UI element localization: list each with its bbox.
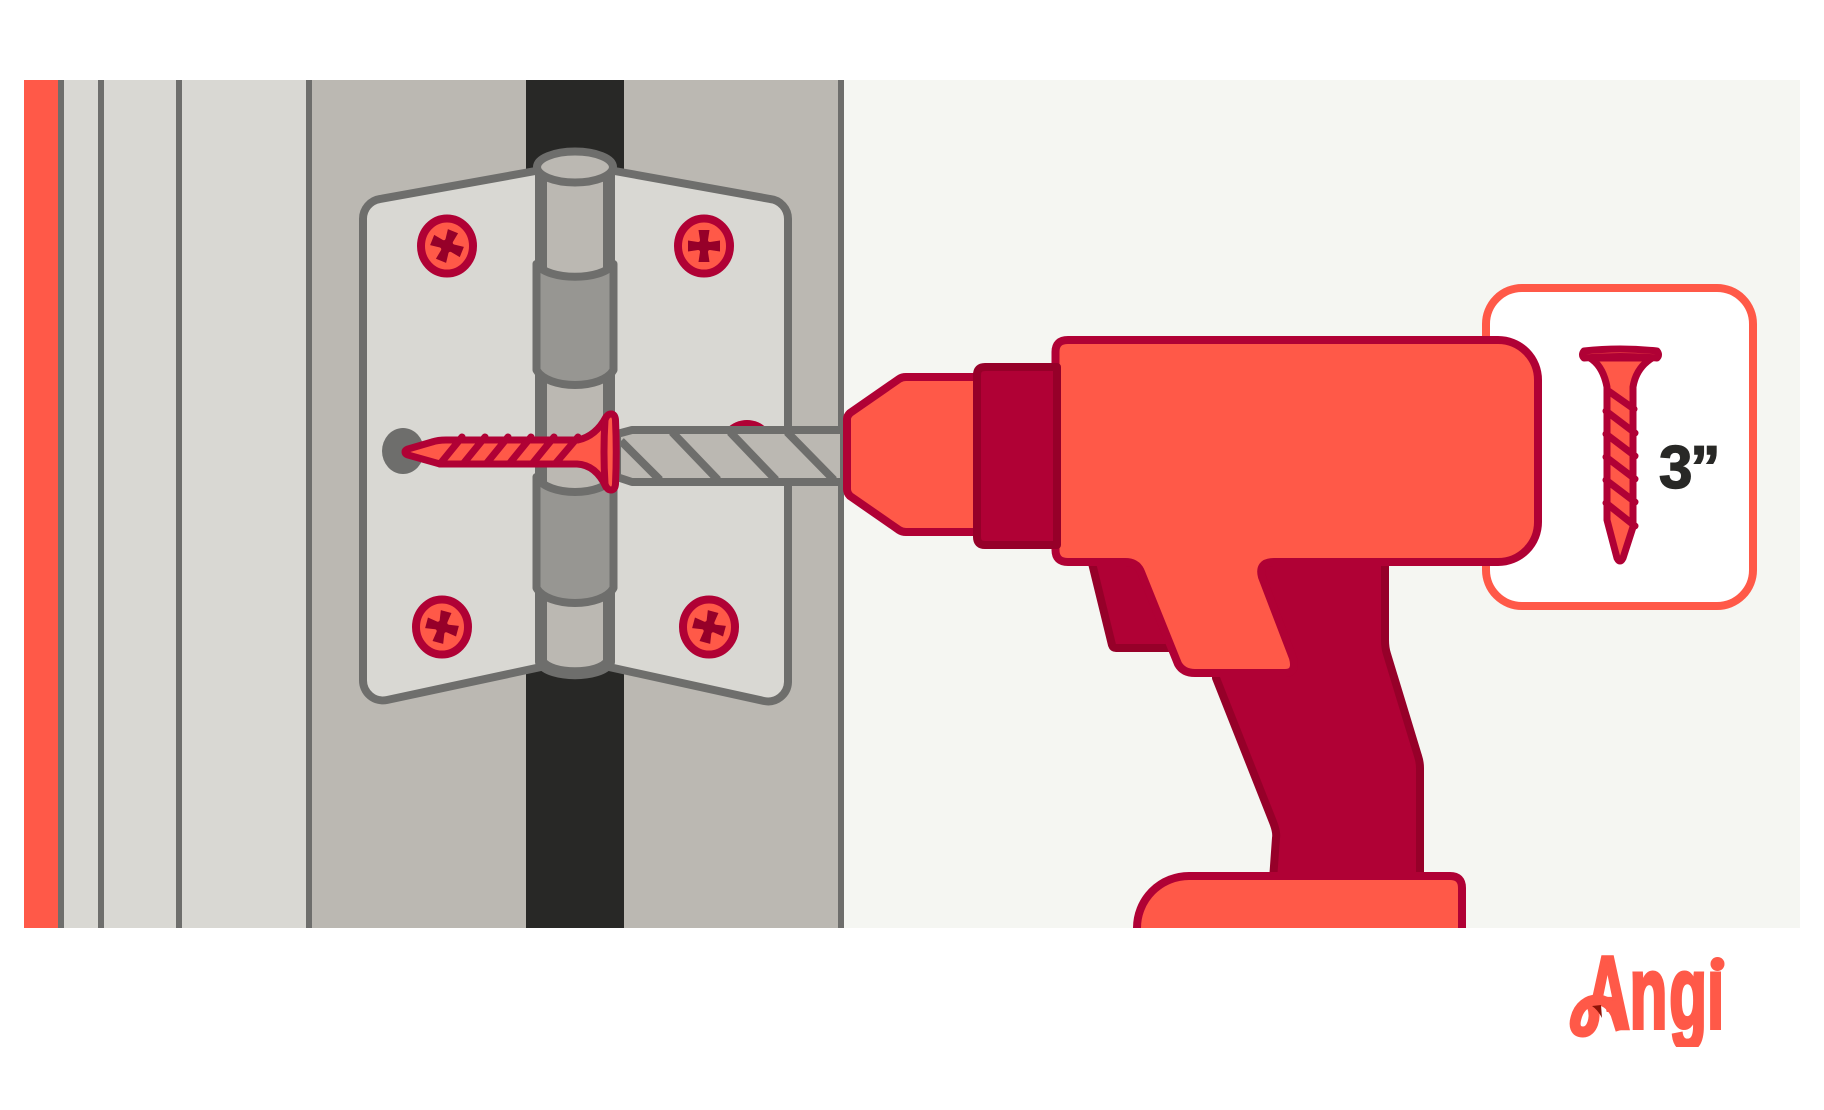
upper knuckle — [536, 264, 614, 385]
logo fold — [1592, 1005, 1602, 1018]
screw threads — [1606, 390, 1635, 526]
drill battery — [1137, 876, 1462, 928]
drill handle — [1216, 550, 1420, 880]
drill — [847, 340, 1538, 928]
empty screw hole — [382, 428, 424, 474]
logo dot — [1710, 957, 1724, 971]
screw threads — [440, 437, 578, 464]
logo wordmark: Angi — [1585, 935, 1724, 1050]
hinge barrel — [541, 167, 609, 673]
barrel top cap — [537, 152, 613, 182]
screw being driven — [405, 414, 616, 490]
drill body — [1056, 340, 1538, 673]
panel: wall background — [24, 80, 1800, 928]
screw head — [1582, 349, 1658, 358]
callout: 3 inch screw icon — [1582, 349, 1658, 561]
screw: top right — [678, 218, 730, 274]
screw: bottom right — [683, 600, 735, 654]
lower knuckle — [536, 477, 614, 603]
screw head — [604, 414, 616, 490]
door frame with trim strips — [24, 80, 844, 928]
logo cover — [1572, 944, 1730, 1058]
right hinge leaf — [609, 170, 788, 701]
callout text: 3” — [1659, 434, 1718, 501]
left hinge leaf — [363, 170, 541, 700]
drill nose — [847, 377, 980, 532]
screw: top left — [421, 218, 473, 274]
screw body — [1590, 358, 1652, 561]
drill bit — [617, 430, 844, 482]
door hinge — [363, 152, 788, 701]
screw body — [405, 417, 606, 487]
drill collar — [977, 367, 1057, 545]
drill trigger — [1090, 555, 1180, 648]
callout box — [1486, 288, 1753, 606]
logo: Angi — [1572, 935, 1730, 1058]
screw: bottom left — [416, 600, 468, 654]
logo loop — [1575, 1000, 1621, 1032]
hidden screw behind drill bit — [718, 420, 776, 480]
